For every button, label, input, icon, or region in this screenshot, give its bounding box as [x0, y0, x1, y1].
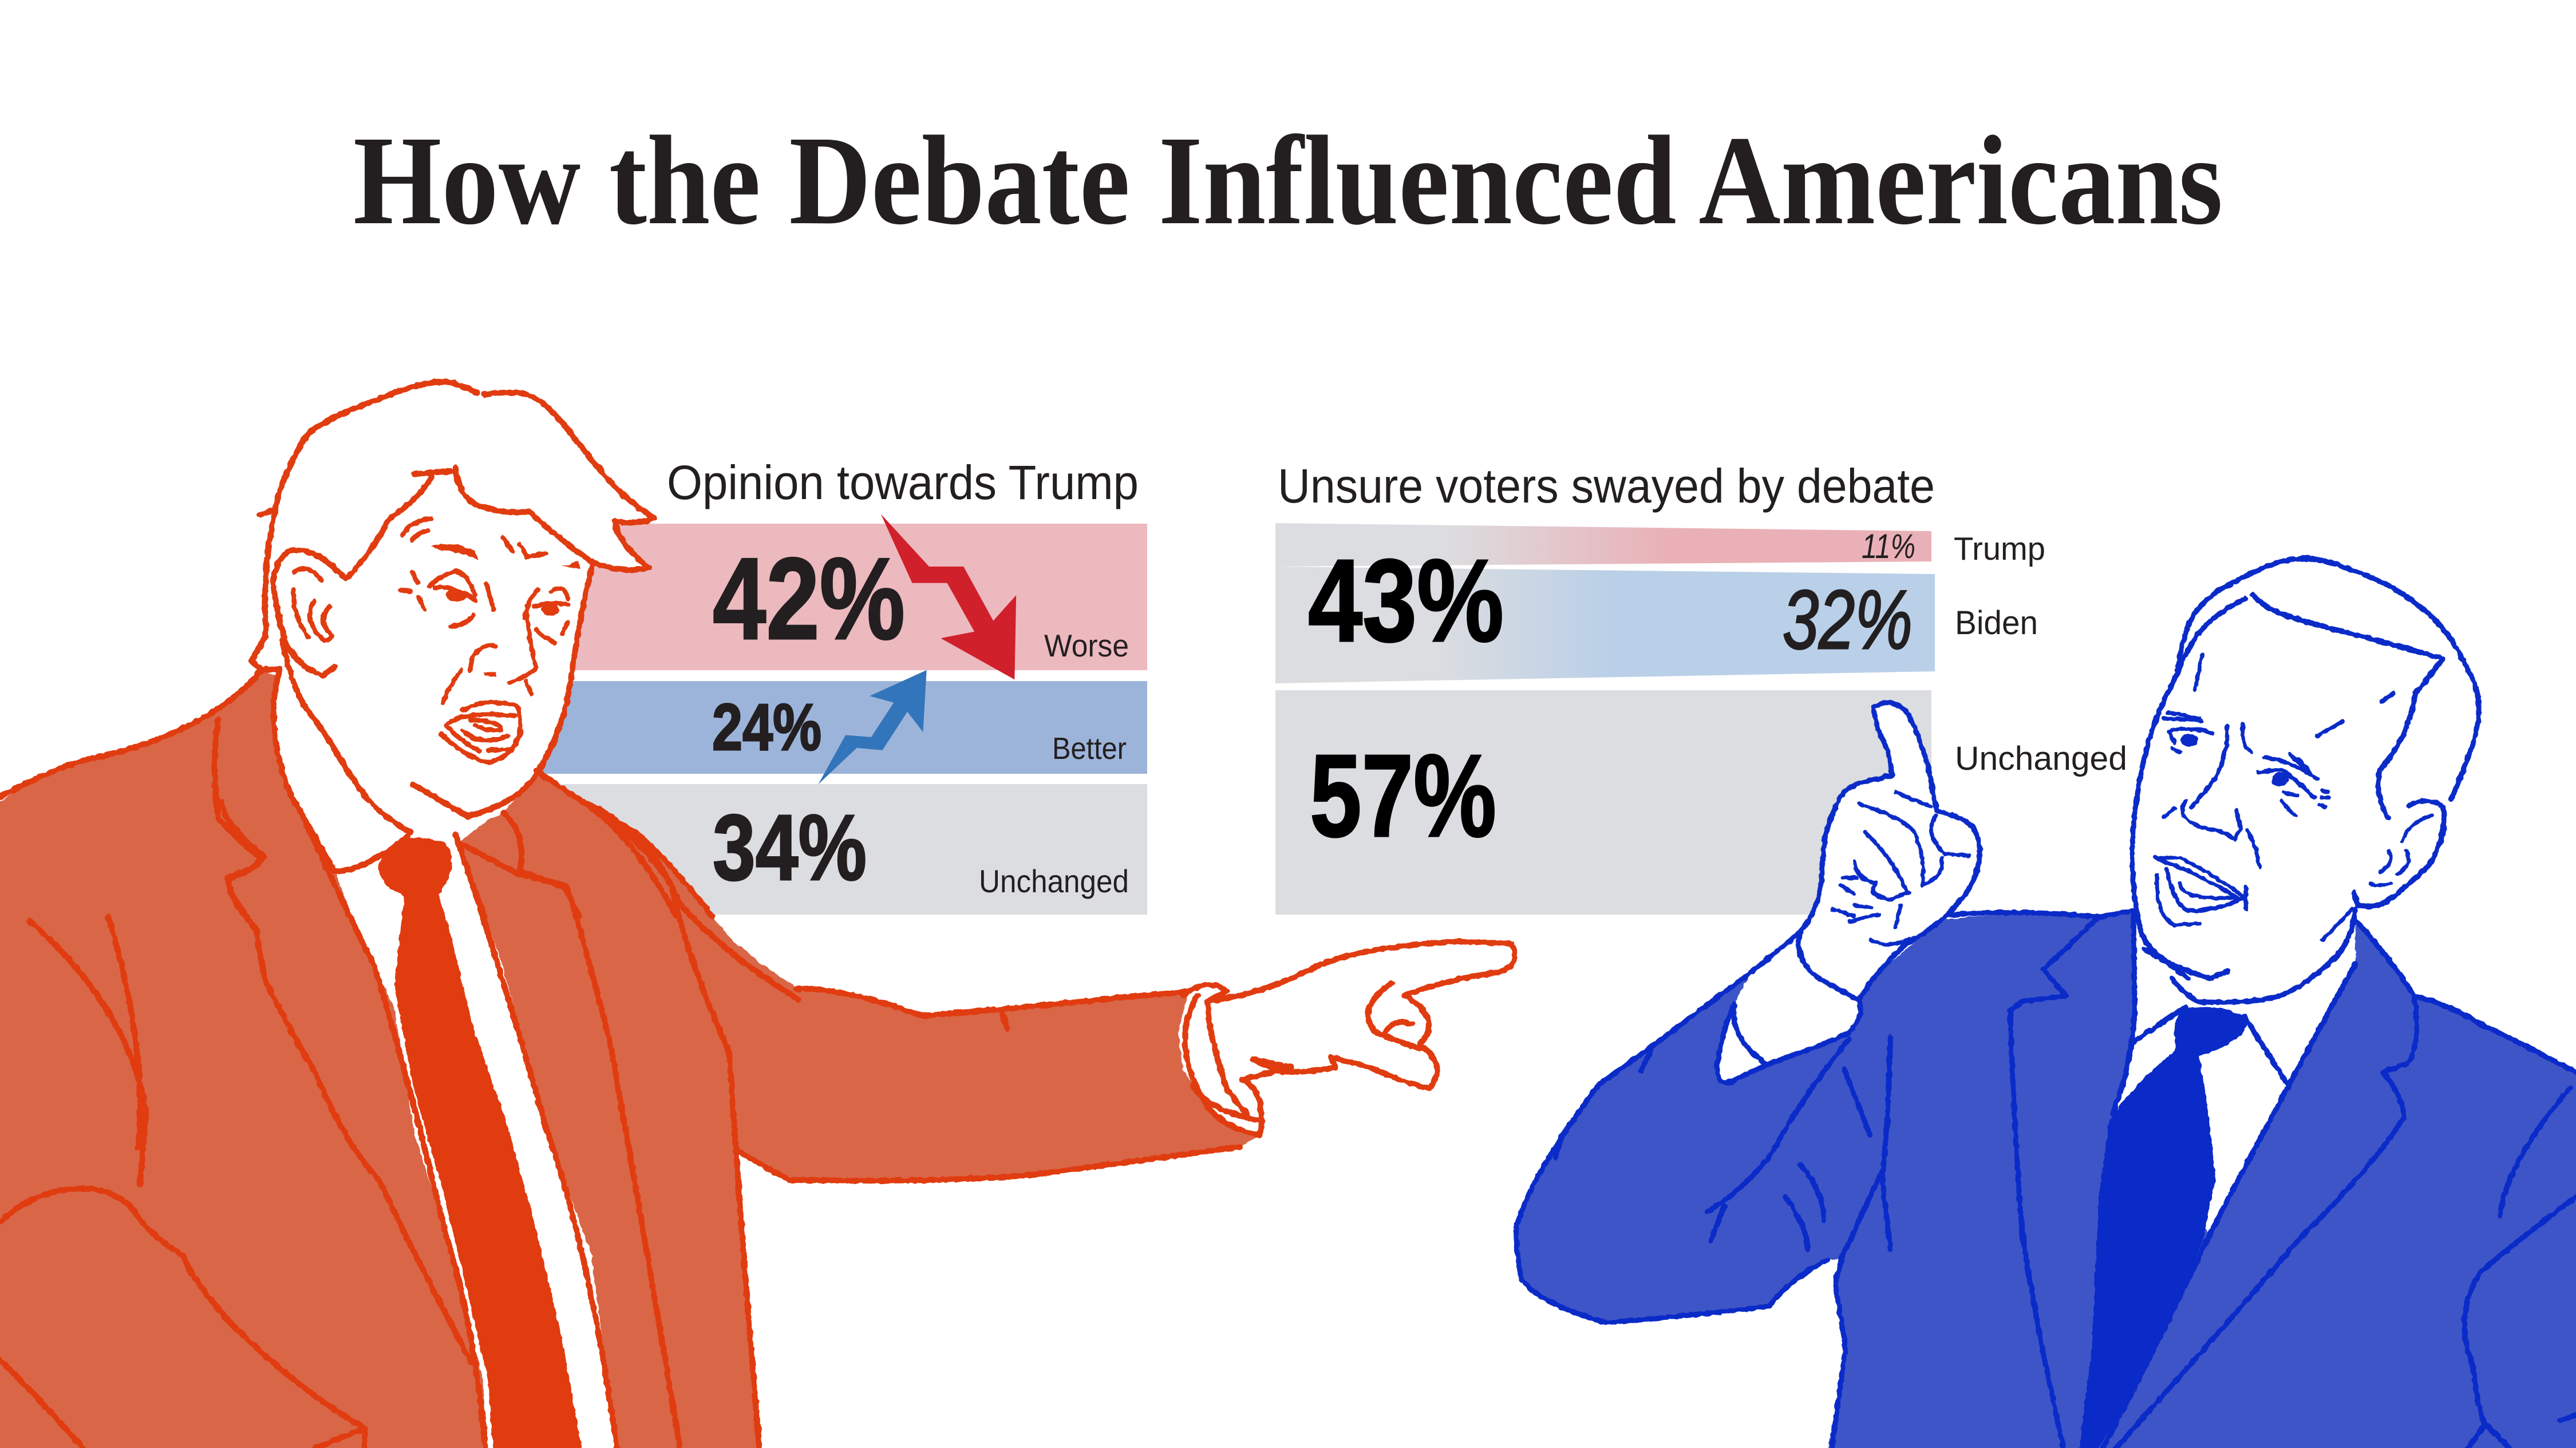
title: How the Debate Influenced Americans	[353, 110, 2223, 251]
label: better: Better	[1052, 731, 1127, 766]
label: worse: Worse	[1044, 628, 1129, 663]
Biden head	[2131, 559, 2479, 1002]
illustration: Trump	[0, 382, 1515, 1448]
panel heading: Unsure voters swayed by debate	[1278, 459, 1935, 513]
panel heading: Opinion towards Trump	[667, 456, 1139, 509]
value: 57%: 57%	[1310, 730, 1496, 861]
arrow: down red	[881, 514, 1016, 679]
value: 24%: 24%	[712, 691, 821, 764]
value: 43%: 43%	[1308, 535, 1504, 666]
Trump pointing hand	[1183, 941, 1515, 1136]
value: 11%: 11%	[1862, 527, 1915, 565]
illustration: Biden	[1516, 559, 2576, 1448]
label: unchanged: Unchanged	[979, 863, 1129, 899]
bar: unchanged	[515, 784, 1147, 915]
bar: unchanged	[1275, 690, 1931, 915]
value: 34%: 34%	[713, 795, 867, 900]
value: 42%: 42%	[713, 534, 905, 664]
Biden raised hand	[1717, 703, 1980, 1083]
label: unchanged: Unchanged	[1955, 740, 2127, 777]
arrow: up blue	[818, 670, 927, 784]
Trump suit and shirt	[0, 670, 1260, 1448]
label: Trump: Trump	[1954, 531, 2045, 567]
panel: opinion towards Trump	[515, 456, 1147, 915]
Trump head	[0, 382, 712, 916]
bar: swayed to Biden	[1275, 567, 1935, 683]
bar: worse	[567, 524, 1147, 670]
Biden suit	[1516, 911, 2576, 1448]
bar: better	[515, 681, 1147, 774]
value: 32%: 32%	[1783, 573, 1913, 666]
label: Biden: Biden	[1955, 604, 2038, 642]
bar: swayed to Trump	[1275, 523, 1931, 567]
panel: unsure voters swayed by debate	[1275, 459, 2127, 915]
